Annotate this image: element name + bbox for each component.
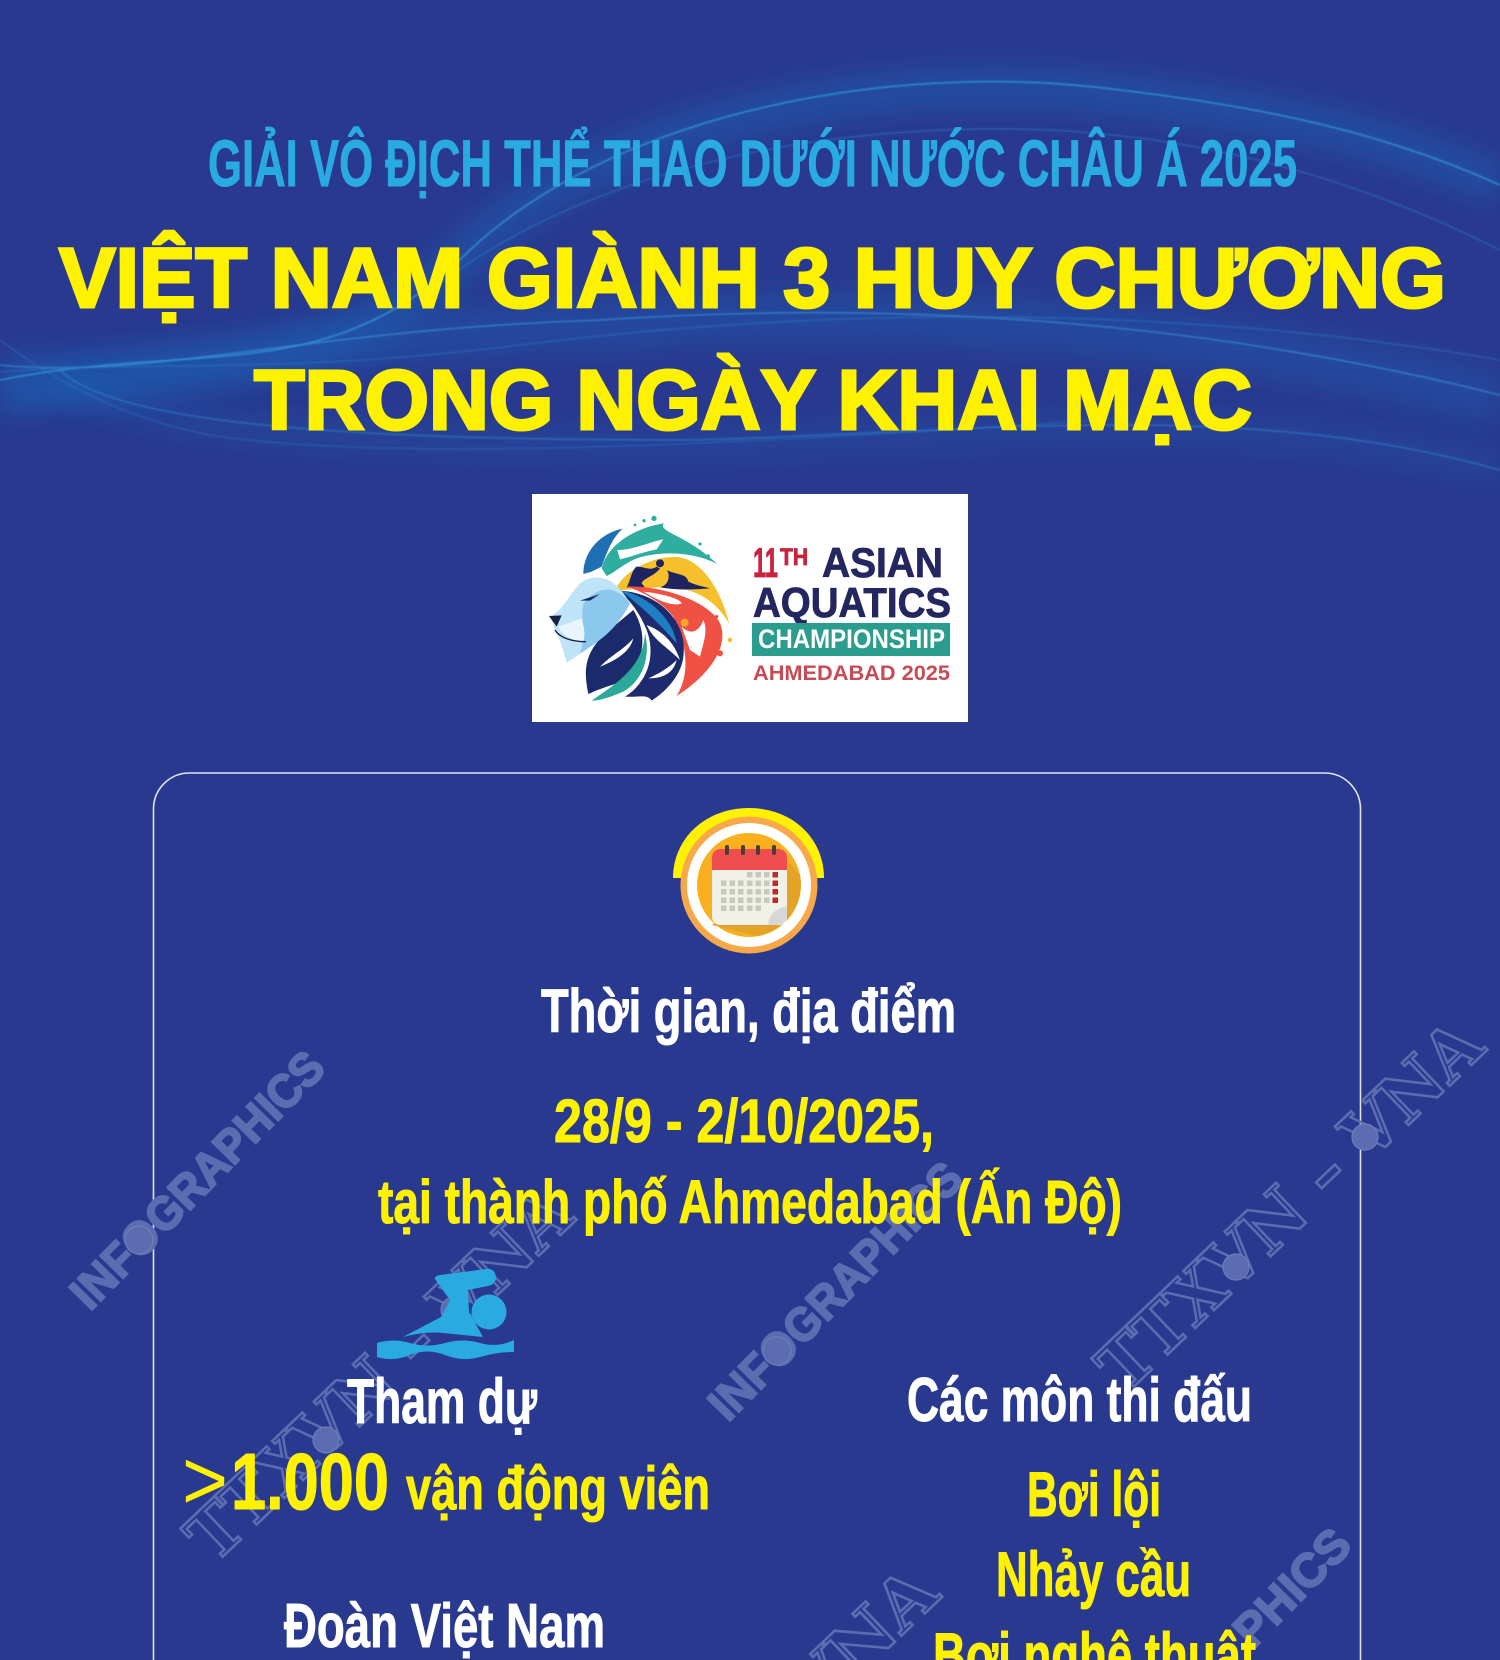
logo text: ASIAN bbox=[822, 539, 943, 586]
watermarks: INFOGRAPHICS bbox=[697, 1151, 973, 1430]
icon: swimmer bbox=[377, 1269, 514, 1359]
stat: over 1000 athletes: vận động viên bbox=[406, 1455, 710, 1522]
stat: over 1000 athletes: 1.000 bbox=[231, 1437, 389, 1526]
panel: main rounded frame bbox=[154, 773, 1360, 1660]
logo text: TH bbox=[780, 544, 808, 571]
icon: calendar badge bbox=[673, 808, 824, 954]
icon: lion logo bbox=[549, 516, 732, 701]
logo panel bbox=[532, 494, 968, 722]
list: events bbox=[933, 1460, 1256, 1660]
heading: Vietnam team: Đoàn Việt Nam bbox=[284, 1592, 605, 1660]
text: dates and city: tại thành phố Ahmedabad (Ấn Độ) bbox=[378, 1168, 1122, 1236]
watermarks: TTXVN – VNA bbox=[1082, 1004, 1500, 1407]
stat: over 1000 athletes bbox=[182, 1433, 710, 1527]
text: dates and city: 28/9 - 2/10/2025, bbox=[554, 1087, 934, 1155]
watermarks: TTXVN – VNA bbox=[171, 1174, 589, 1577]
watermarks bbox=[59, 1004, 1500, 1660]
logo text: CHAMPIONSHIP bbox=[758, 624, 945, 654]
list: events: Bơi lội bbox=[1027, 1460, 1161, 1530]
logo text: AHMEDABAD 2025 bbox=[753, 662, 950, 685]
list: events: Nhảy cầu bbox=[996, 1540, 1191, 1610]
logo text: 11 bbox=[753, 539, 778, 586]
logo text: AQUATICS bbox=[753, 579, 951, 626]
logo text bbox=[752, 539, 951, 685]
stat: over 1000 athletes: > bbox=[182, 1433, 228, 1527]
title: TRONG NGÀY KHAI MẠC bbox=[254, 353, 1252, 447]
title bbox=[59, 231, 1446, 447]
heading: events: Các môn thi đấu bbox=[907, 1366, 1252, 1435]
watermarks: PHICS bbox=[1222, 1517, 1361, 1657]
heading: participants: Tham dự bbox=[347, 1367, 537, 1437]
heading: time and place: Thời gian, địa điểm bbox=[541, 977, 956, 1045]
title: VIỆT NAM GIÀNH 3 HUY CHƯƠNG bbox=[59, 231, 1446, 325]
text: dates and city bbox=[378, 1087, 1122, 1236]
watermarks: INFOGRAPHICS bbox=[59, 1040, 335, 1319]
